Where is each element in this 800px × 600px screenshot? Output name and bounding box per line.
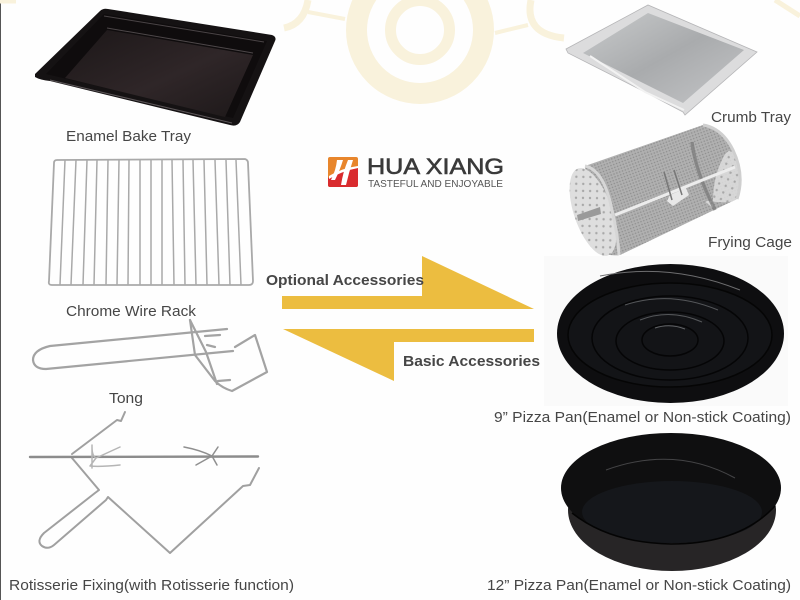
panel: 12 inch pizza pan: [487, 433, 791, 594]
icon: crumb tray: [566, 5, 757, 115]
icon: tong: [33, 320, 267, 391]
icon: 9 inch pizza pan: [557, 264, 784, 403]
panel: crumb tray: [566, 5, 791, 126]
arrow: basic accessories: [283, 329, 540, 381]
decorative background rings: [0, 0, 800, 94]
left edge line: [0, 0, 1, 600]
icon: logo mark: [328, 157, 358, 187]
icon: wire rack: [49, 159, 253, 285]
label: 12 inch pizza pan: 12” Pizza Pan(Enamel or Non-stick Coating): [487, 577, 791, 594]
panel: 9 inch pizza pan: [494, 264, 791, 426]
label: Enamel Bake Tray: Enamel Bake Tray: [66, 128, 192, 145]
label: Chrome Wire Rack: Chrome Wire Rack: [66, 303, 197, 320]
image panel backing: 9 inch pan: [544, 256, 788, 406]
panel: chrome wire rack: [49, 159, 253, 320]
label: Rotisserie Fixing: Rotisserie Fixing(with Rotisserie function): [9, 577, 294, 594]
label: Basic Accessories: Basic Accessories: [403, 353, 540, 370]
arrow: optional accessories: [266, 256, 534, 309]
label: Frying Cage: Frying Cage: [708, 234, 792, 251]
panel: rotisserie fixing: [9, 412, 294, 594]
icon: rotisserie fixing: [30, 412, 259, 553]
panel: frying cage: [560, 125, 792, 262]
icon: frying cage: [560, 125, 740, 262]
label: Crumb Tray: Crumb Tray: [711, 109, 791, 126]
label: Tong: Tong: [109, 390, 143, 407]
icon: 12 inch pizza pan: [561, 433, 781, 571]
panel: enamel bake tray: [35, 9, 276, 145]
label: 9 inch pizza pan: 9” Pizza Pan(Enamel or Non-stick Coating): [494, 409, 791, 426]
icon: bake tray: [35, 9, 276, 126]
tagline: TASTEFUL AND ENJOYABLE: [368, 179, 503, 190]
logo: Hua Xiang: [328, 154, 504, 190]
brand name: HUA XIANG: [367, 154, 504, 179]
label: Optional Accessories: Optional Accessories: [266, 272, 424, 289]
panel: tong: [33, 320, 267, 407]
